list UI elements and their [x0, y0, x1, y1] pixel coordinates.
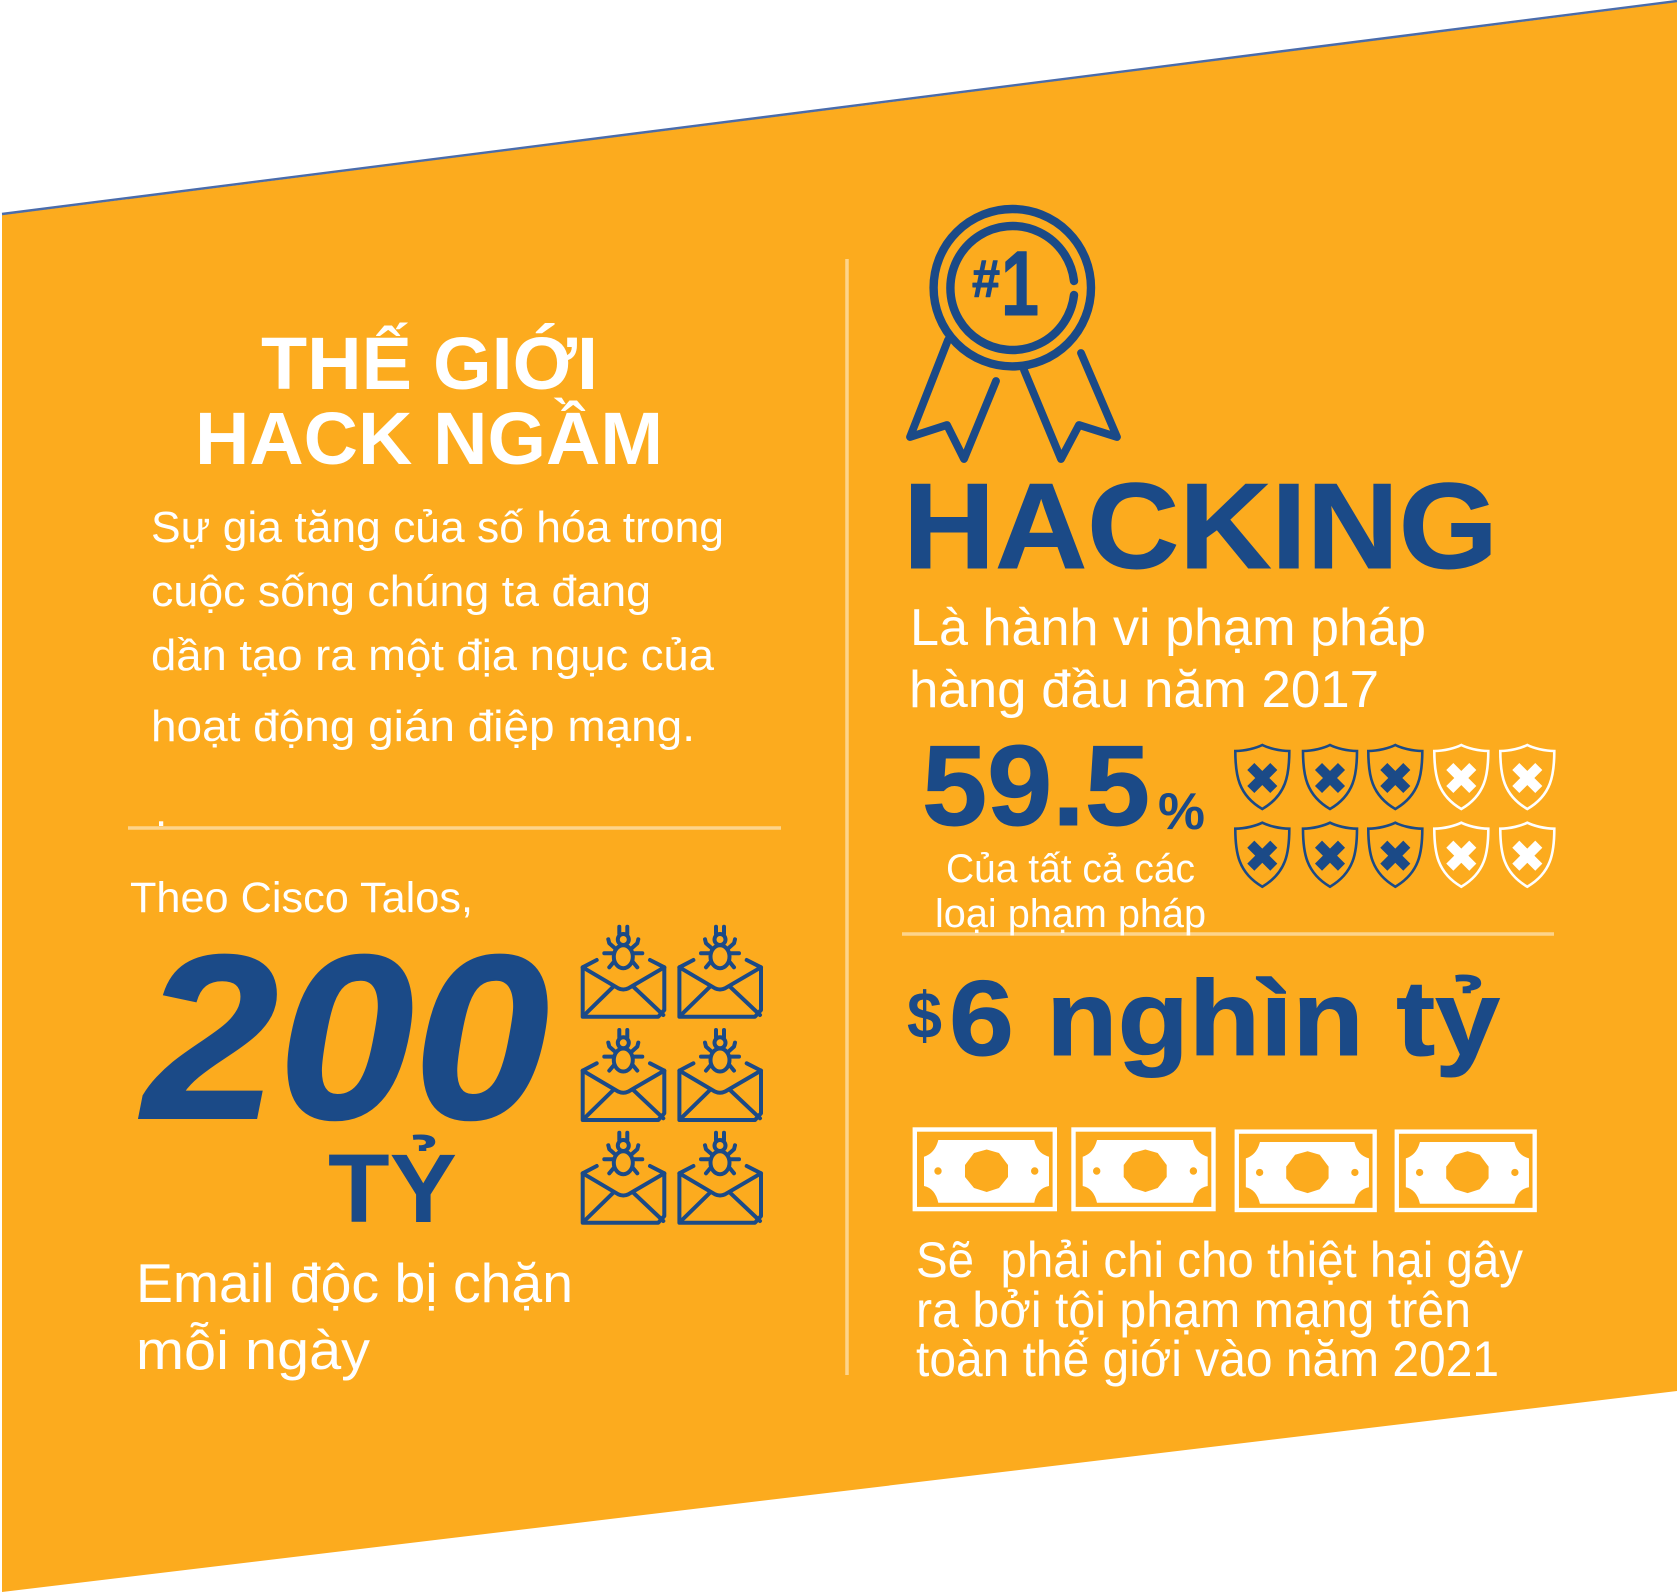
caption: of all crimes: Của tất cả các — [946, 847, 1195, 891]
text: leading crime — [909, 599, 1426, 719]
title — [195, 322, 663, 480]
caption: of all crimes — [935, 847, 1206, 936]
caption: cybercrime cost: ra bởi tội phạm mạng trên — [916, 1282, 1471, 1338]
caption: cybercrime cost — [916, 1232, 1523, 1387]
intro text block: . — [155, 787, 167, 836]
intro text block: hoạt động gián điệp mạng. — [151, 702, 695, 751]
icon: award ribbon #1 — [910, 209, 1117, 459]
caption: of all crimes: loại phạm pháp — [935, 892, 1206, 936]
caption: malicious emails: mỗi ngày — [136, 1319, 371, 1381]
caption: malicious emails — [136, 1252, 573, 1381]
icons: envelopes with bugs — [583, 927, 761, 1223]
caption: malicious emails: Email độc bị chặn — [136, 1252, 573, 1314]
caption: cybercrime cost: Sẽ phải chi cho thiệt hại gây — [916, 1232, 1523, 1288]
intro text block — [151, 503, 724, 836]
icon: award ribbon #1: # — [972, 250, 1000, 309]
stat: 200 ty: 200 — [139, 906, 549, 1168]
intro text block: cuộc sống chúng ta đang — [151, 567, 651, 616]
stat: 59.5%: 59.5 — [922, 723, 1150, 850]
stat: 59.5%: % — [1158, 783, 1205, 841]
divider: right panel — [902, 932, 1554, 936]
icons: banknotes — [915, 1130, 1535, 1210]
blue top edge line — [2, 1, 1677, 214]
divider: left panel — [128, 826, 781, 830]
stat: 6 trillion dollars: $ — [907, 978, 942, 1052]
source line: Theo Cisco Talos, — [130, 874, 473, 922]
vertical divider — [845, 259, 849, 1375]
heading: hacking: HACKING — [903, 458, 1498, 594]
title: HACK NGẦM — [195, 397, 663, 480]
title: THẾ GIỚI — [261, 322, 598, 405]
icons: shields — [1235, 745, 1554, 887]
icon: award ribbon #1: 1 — [1001, 233, 1039, 335]
stat: 200 ty: TỶ — [328, 1134, 457, 1243]
stat: 6 trillion dollars: 6 nghìn tỷ — [949, 958, 1500, 1078]
text: leading crime: hàng đầu năm 2017 — [909, 661, 1379, 719]
intro text block: dần tạo ra một địa ngục của — [151, 631, 715, 680]
caption: cybercrime cost: toàn thế giới vào năm 2021 — [916, 1331, 1499, 1387]
intro text block: Sự gia tăng của số hóa trong — [151, 503, 724, 552]
text: leading crime: Là hành vi phạm pháp — [910, 599, 1426, 657]
